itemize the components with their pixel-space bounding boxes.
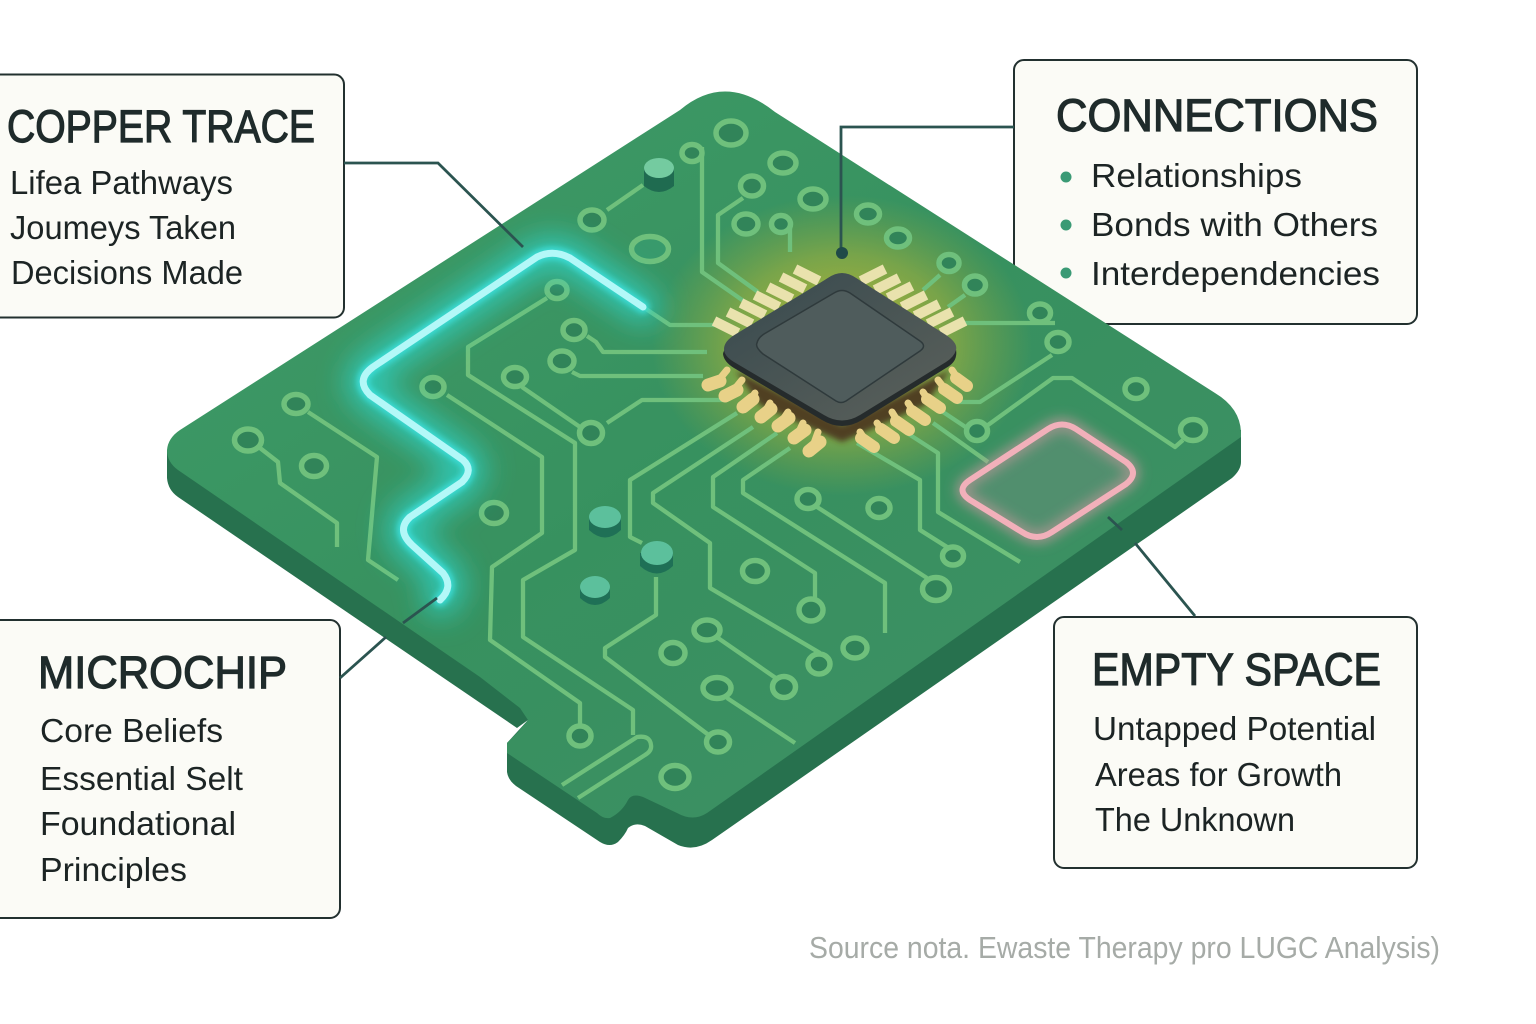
heading: microchip: MICROCHIP bbox=[38, 647, 287, 698]
callout: copper trace bbox=[0, 74, 344, 318]
source note: Source nota. Ewaste Therapy pro LUGC Analysis) bbox=[809, 930, 1440, 965]
via pads bbox=[234, 121, 1206, 788]
component: cylinder lower bbox=[580, 576, 610, 605]
circuit board bbox=[167, 91, 1241, 848]
component: cylinder middle bbox=[589, 506, 621, 538]
callout: microchip bbox=[0, 620, 340, 918]
board side edge bbox=[167, 430, 1241, 848]
text: copper trace line 3: Decisions Made bbox=[11, 254, 243, 291]
text: relationships: Relationships bbox=[1091, 157, 1302, 194]
heading: copper trace: COPPER TRACE bbox=[7, 101, 315, 152]
circuit traces bbox=[260, 147, 1183, 798]
component: cylinder top bbox=[644, 158, 674, 192]
bullet 2 bbox=[1060, 220, 1072, 230]
text: principles: Principles bbox=[40, 851, 187, 888]
leader line: microchip bbox=[340, 598, 437, 678]
callout: connections bbox=[1014, 60, 1417, 324]
leader line: connections bbox=[836, 127, 1014, 259]
text: essential self: Essential Selt bbox=[40, 760, 243, 797]
text: areas for growth: Areas for Growth bbox=[1095, 756, 1342, 793]
upper right contact pads bbox=[861, 269, 965, 333]
text: interdependencies: Interdependencies bbox=[1091, 255, 1380, 292]
empty space pink outline bbox=[962, 424, 1133, 537]
chip side bbox=[723, 274, 956, 426]
text: copper trace line 1: Lifea Pathways bbox=[10, 164, 233, 201]
callout: empty space bbox=[1054, 617, 1417, 868]
heading: empty space: EMPTY SPACE bbox=[1092, 644, 1381, 695]
text: untapped potential: Untapped Potential bbox=[1093, 710, 1376, 747]
text: foundational: Foundational bbox=[40, 805, 236, 842]
board top face bbox=[167, 91, 1241, 818]
lower right pins bbox=[860, 370, 967, 447]
bullet 3 bbox=[1060, 268, 1072, 278]
text: copper trace line 2: Joumeys Taken bbox=[10, 209, 236, 246]
leader line: empty space bbox=[1108, 517, 1195, 616]
text: core beliefs: Core Beliefs bbox=[40, 712, 223, 749]
leader line: copper trace bbox=[344, 163, 523, 247]
microchip bbox=[708, 269, 967, 451]
chip top bbox=[724, 273, 956, 420]
text: the unknown: The Unknown bbox=[1095, 801, 1295, 838]
upper left contact pads bbox=[714, 269, 819, 333]
chip inner recess bbox=[757, 290, 924, 402]
text: bonds with others: Bonds with Others bbox=[1091, 206, 1378, 243]
chip shadow bbox=[735, 370, 950, 442]
heading: connections: CONNECTIONS bbox=[1056, 90, 1378, 141]
lower left pins bbox=[708, 370, 820, 451]
component: cylinder right bbox=[640, 541, 673, 574]
bullet 1 bbox=[1060, 172, 1072, 182]
gold glow around chip bbox=[652, 195, 1032, 495]
glowing cyan copper trace bbox=[363, 253, 643, 600]
